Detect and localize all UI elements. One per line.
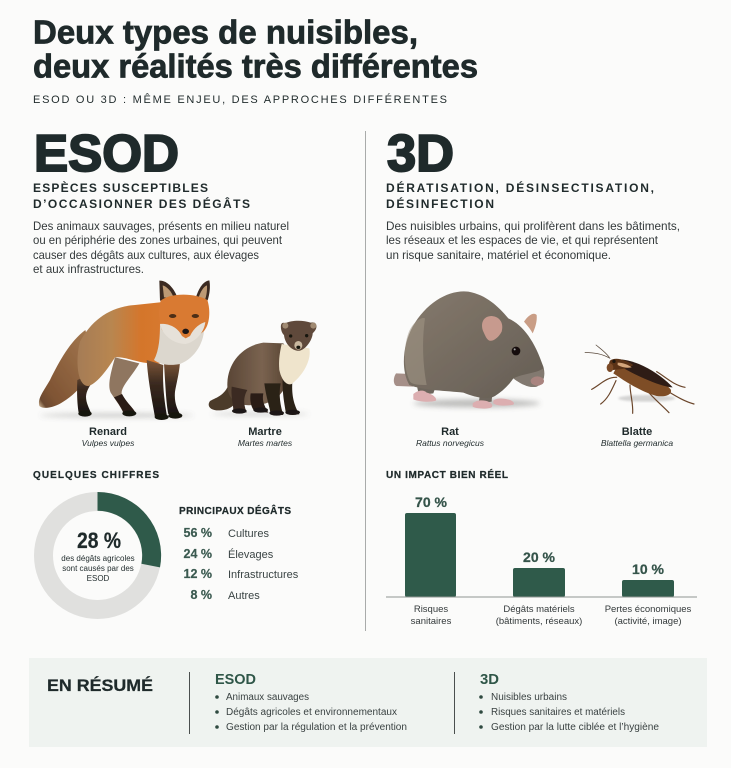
divider right — [454, 672, 455, 734]
caption: Martre: Martre — [248, 426, 282, 438]
title — [33, 14, 478, 84]
ESOD definition — [33, 180, 250, 211]
3D description: un risque sanitaire, matériel et économique. — [386, 248, 611, 262]
3D definition: DÉSINFECTION — [386, 196, 494, 211]
caption: Blatte — [601, 426, 673, 448]
bar: dégâts matériels: Dégâts matériels — [503, 604, 575, 615]
donut caption — [61, 554, 135, 583]
icon: rat — [394, 291, 544, 409]
row: autres: 8 % — [190, 588, 212, 602]
panel: summary — [29, 658, 707, 747]
column divider — [365, 131, 366, 631]
row: infrastructures — [184, 567, 299, 581]
caption: Martre — [238, 426, 293, 448]
summary: 3D: Nuisibles urbains — [491, 692, 567, 703]
row: cultures: 56 % — [184, 526, 212, 540]
ESOD description: ou en périphérie des zones urbaines, qui peuvent — [33, 233, 283, 247]
summary: ESOD: ESOD — [215, 672, 256, 688]
summary: 3D: Gestion par la lutte ciblée et l’hygiène — [491, 722, 659, 733]
bar: risques sanitaires: sanitaires — [411, 616, 452, 627]
3D description: Des nuisibles urbains, qui prolifèrent dans les bâtiments, — [386, 219, 680, 233]
bar: dégâts matériels: (bâtiments, réseaux) — [496, 616, 582, 627]
divider left — [189, 672, 190, 734]
heading: ESOD: ESOD — [34, 124, 179, 182]
bar: risques sanitaires — [405, 494, 456, 627]
panel: 3D — [386, 124, 697, 627]
row: élevages — [184, 547, 274, 561]
3D description: les réseaux et les espaces de vie, et qui représentent — [386, 233, 659, 247]
row: cultures — [184, 526, 269, 540]
row: élevages: Élevages — [228, 548, 274, 561]
donut caption: des dégâts agricoles — [61, 554, 135, 563]
panel: ESOD — [33, 124, 316, 610]
donut chart — [44, 492, 161, 610]
heading: en résumé: EN RÉSUMÉ — [47, 676, 153, 695]
3D definition — [386, 180, 654, 211]
donut value: 28 % — [77, 528, 121, 553]
summary: 3D — [479, 672, 659, 733]
caption: Rat: Rattus norvegicus — [416, 438, 485, 448]
ESOD definition: D’OCCASIONNER DES DÉGÂTS — [33, 196, 250, 211]
bar: pertes économiques: 10 % — [632, 561, 665, 577]
3D description — [386, 219, 680, 262]
caption: Rat: Rat — [441, 426, 459, 438]
summary: ESOD — [215, 672, 407, 733]
heading: 3D: 3D — [387, 124, 454, 182]
ESOD definition: ESPÈCES SUSCEPTIBLES — [33, 180, 208, 195]
row: cultures: Cultures — [228, 528, 269, 540]
caption: Renard: Renard — [89, 426, 127, 438]
chart axis — [386, 596, 697, 598]
title: deux réalités très différentes — [33, 48, 478, 84]
ESOD description: Des animaux sauvages, présents en milieu naturel — [33, 219, 289, 233]
caption: Blatte: Blattella germanica — [601, 438, 673, 448]
heading: quelques chiffres: QUELQUES CHIFFRES — [33, 470, 159, 481]
summary: ESOD: Dégâts agricoles et environnementaux — [226, 707, 397, 718]
bar: pertes économiques — [605, 561, 692, 627]
damage list — [179, 504, 299, 602]
row: infrastructures: Infrastructures — [228, 569, 299, 581]
3D definition: DÉRATISATION, DÉSINSECTISATION, — [386, 180, 654, 195]
ESOD description: et aux infrastructures. — [33, 262, 144, 276]
summary: 3D: Risques sanitaires et matériels — [491, 707, 625, 718]
bar: pertes économiques: (activité, image) — [614, 616, 682, 627]
icon: cockroach — [585, 345, 694, 413]
summary: ESOD: Animaux sauvages — [226, 692, 309, 703]
caption: Renard — [82, 426, 135, 448]
row: autres: Autres — [228, 590, 260, 602]
subtitle: ESOD OU 3D : MÊME ENJEU, DES APPROCHES DIFFÉRENTES — [33, 93, 447, 106]
ESOD description — [33, 219, 289, 276]
bar: pertes économiques: Pertes économiques — [605, 604, 692, 615]
donut caption: ESOD — [87, 574, 110, 583]
caption: Martre: Martes martes — [238, 438, 293, 448]
caption: Rat — [416, 426, 485, 448]
heading: un impact bien réel: UN IMPACT BIEN RÉEL — [386, 468, 508, 481]
caption: Blatte: Blatte — [622, 426, 652, 438]
row: infrastructures: 12 % — [184, 567, 212, 581]
caption: Renard: Vulpes vulpes — [82, 438, 135, 448]
row: élevages: 24 % — [184, 547, 212, 561]
summary: ESOD: Gestion par la régulation et la prévention — [226, 722, 407, 733]
icon: marten — [209, 321, 316, 416]
ESOD description: causer des dégâts aux cultures, aux élevages — [33, 248, 259, 262]
heading: principaux dégâts: PRINCIPAUX DÉGÂTS — [179, 504, 291, 517]
title: Deux types de nuisibles, — [33, 14, 418, 50]
bar: risques sanitaires: 70 % — [415, 494, 448, 510]
icon: fox — [39, 280, 210, 420]
bar: dégâts matériels — [496, 549, 582, 627]
bar: dégâts matériels: 20 % — [523, 549, 556, 565]
summary: 3D: 3D — [480, 672, 499, 688]
row: autres — [190, 588, 260, 602]
donut caption: sont causés par des — [62, 564, 134, 573]
bar: risques sanitaires: Risques — [414, 604, 448, 615]
bar chart — [386, 494, 697, 627]
